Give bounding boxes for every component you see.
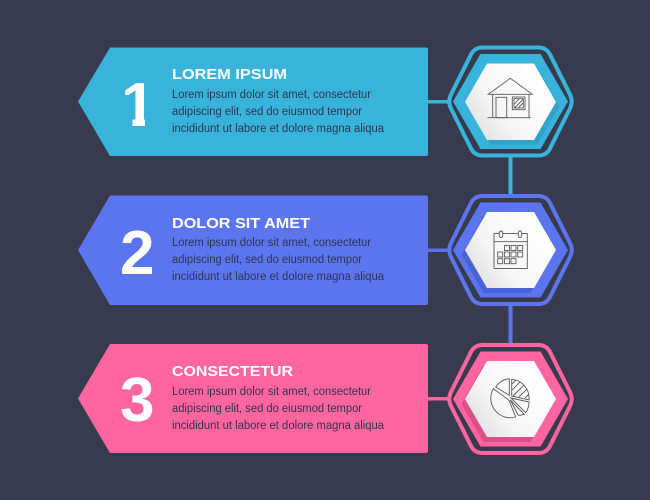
- text block: step 1: Lorem ipsum dolor sit amet, consectetur: [172, 89, 371, 101]
- hexagon: step 2: [449, 196, 572, 304]
- icon: pie chart: [491, 378, 535, 418]
- text block: step 1: adipiscing elit, sed do eiusmod tempor: [172, 106, 362, 118]
- text block: step 3: Lorem ipsum dolor sit amet, consectetur: [172, 386, 371, 398]
- arrow connector: panel 2 to hexagon: [427, 248, 448, 252]
- text block: step 2: [172, 237, 385, 283]
- number 2: 2: [120, 219, 154, 288]
- text block: step 3: incididunt ut labore et dolore magna aliqua: [172, 420, 385, 432]
- panel: step 3: [78, 344, 428, 453]
- arrow connector: panel 1 to hexagon: [427, 100, 448, 104]
- panel: step 1: [78, 48, 428, 156]
- heading: consectetur: CONSECTETUR: [172, 363, 293, 380]
- number 1: 1: [121, 71, 155, 140]
- heading: lorem ipsum: LOREM IPSUM: [172, 66, 287, 83]
- heading: dolor sit amet: DOLOR SIT AMET: [172, 215, 310, 232]
- text block: step 1: [172, 89, 385, 135]
- arrow connector: panel 3 to hexagon: [427, 397, 448, 400]
- text block: step 3: adipiscing elit, sed do eiusmod tempor: [172, 403, 362, 415]
- text block: step 2: Lorem ipsum dolor sit amet, consectetur: [172, 237, 371, 249]
- number 3: 3: [120, 366, 154, 435]
- text block: step 2: adipiscing elit, sed do eiusmod tempor: [172, 254, 362, 266]
- connector: step 2 to step 3: [508, 303, 512, 345]
- text block: step 3: [172, 386, 385, 432]
- text block: step 1: incididunt ut labore et dolore magna aliqua: [172, 123, 385, 135]
- icon: house: [488, 78, 532, 118]
- hexagon: step 3: [449, 345, 572, 453]
- icon: calendar: [494, 231, 527, 268]
- text block: step 2: incididunt ut labore et dolore magna aliqua: [172, 271, 385, 283]
- hexagon: step 1: [449, 48, 572, 156]
- connector: step 1 to step 2: [508, 155, 512, 197]
- panel: step 2: [78, 196, 428, 305]
